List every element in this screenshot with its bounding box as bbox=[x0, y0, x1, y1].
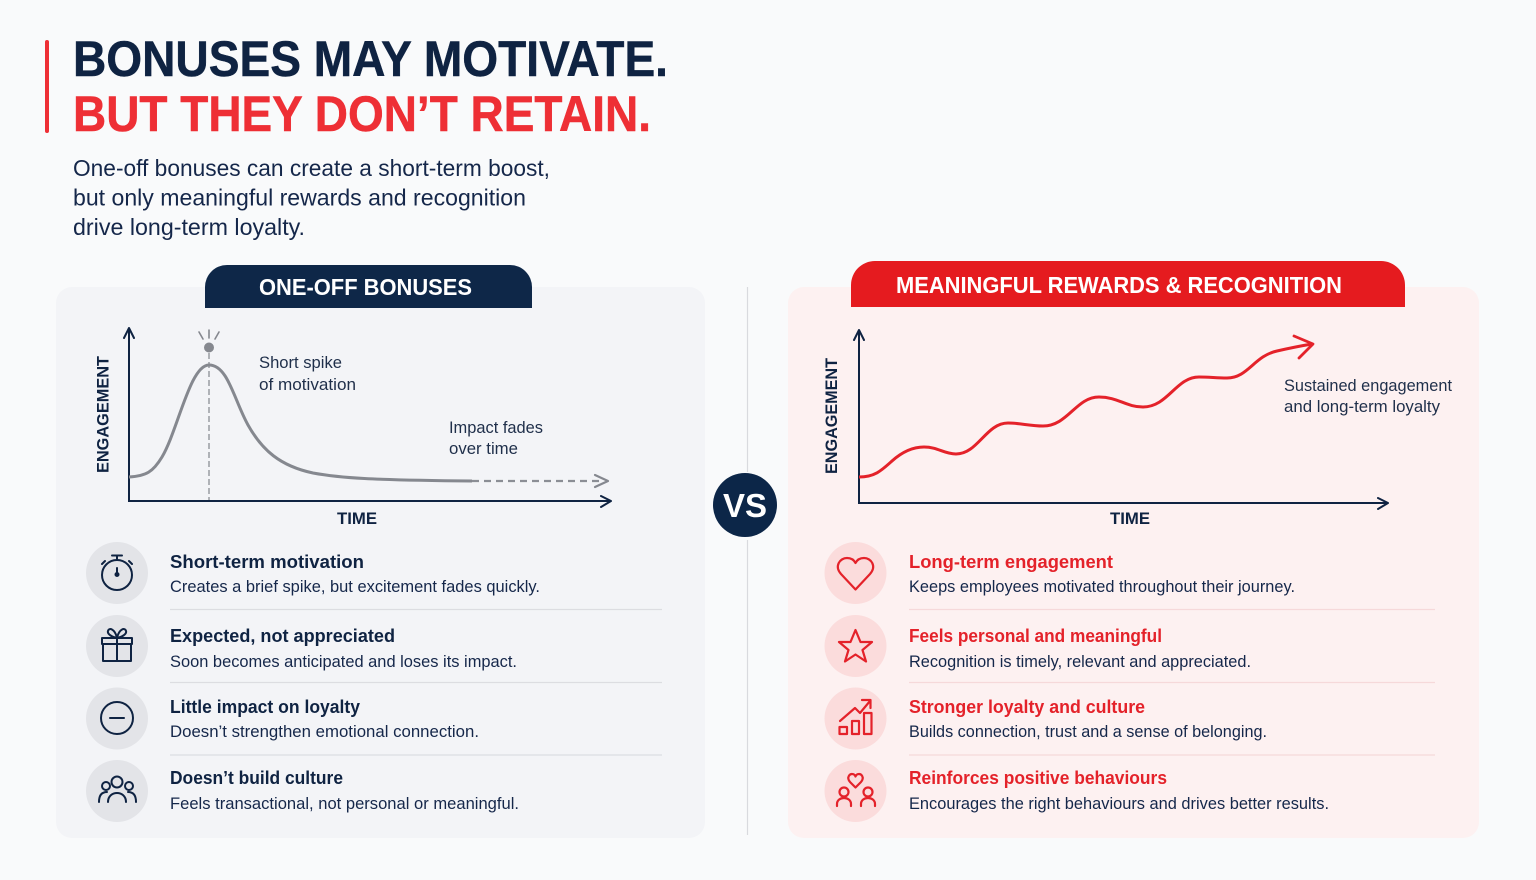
vs badge: VS bbox=[723, 487, 767, 524]
chart: sustained engagement: Sustained engagement bbox=[1284, 377, 1452, 395]
tab: one-off bonuses: ONE-OFF BONUSES bbox=[259, 274, 472, 300]
item: stronger loyalty and culture bbox=[824, 688, 1267, 750]
item: expected, not appreciated bbox=[86, 615, 517, 677]
title: BONUSES MAY MOTIVATE. bbox=[73, 31, 668, 87]
item: reinforces positive behaviours: Encourages the right behaviours and drives better results. bbox=[909, 795, 1329, 813]
item: long-term engagement: Keeps employees motivated throughout their journey. bbox=[909, 578, 1295, 596]
tab: meaningful rewards and recognition bbox=[851, 261, 1405, 307]
icon: growth chart bbox=[840, 700, 872, 734]
icon: star bbox=[839, 630, 872, 662]
chart: short spike of engagement: ENGAGEMENT bbox=[94, 356, 112, 473]
item: little impact on loyalty: Little impact on loyalty bbox=[170, 696, 361, 717]
chart: sustained engagement: ENGAGEMENT bbox=[823, 358, 841, 474]
item: stronger loyalty and culture: Stronger loyalty and culture bbox=[909, 696, 1145, 717]
icon: stopwatch bbox=[102, 556, 132, 590]
panel: meaningful rewards and recognition bbox=[788, 261, 1479, 838]
intro text: One-off bonuses can create a short-term boost, bbox=[73, 155, 550, 181]
title: BUT THEY DON’T RETAIN. bbox=[73, 86, 651, 142]
item: short-term motivation: Short-term motivation bbox=[170, 551, 364, 572]
item: reinforces positive behaviours: Reinforces positive behaviours bbox=[909, 767, 1167, 788]
intro text: drive long-term loyalty. bbox=[73, 214, 305, 240]
vs badge bbox=[713, 473, 777, 537]
header accent bar bbox=[45, 40, 49, 133]
chart: short spike of engagement: Impact fades bbox=[449, 419, 543, 437]
chart: short spike of engagement: Short spike bbox=[259, 354, 342, 372]
item: stronger loyalty and culture: Builds connection, trust and a sense of belonging. bbox=[909, 723, 1267, 741]
item: long-term engagement: Long-term engagement bbox=[909, 551, 1113, 572]
item: feels personal and meaningful: Recognition is timely, relevant and appreciated. bbox=[909, 653, 1251, 671]
title bbox=[73, 31, 668, 142]
chart: sustained engagement: TIME bbox=[1110, 510, 1150, 528]
item: reinforces positive behaviours bbox=[824, 760, 1329, 822]
chart: sustained engagement: and long-term loyalty bbox=[1284, 398, 1441, 416]
tab: one-off bonuses bbox=[205, 265, 532, 308]
tab: meaningful rewards and recognition: MEANINGFUL REWARDS & RECOGNITION bbox=[896, 272, 1342, 298]
chart: short spike of engagement: of motivation bbox=[259, 376, 356, 394]
icon: minus circle bbox=[101, 702, 133, 734]
icon: people bbox=[99, 776, 136, 802]
chart: sustained engagement bbox=[823, 330, 1452, 528]
item: expected, not appreciated: Expected, not appreciated bbox=[170, 625, 395, 646]
item: feels personal and meaningful bbox=[824, 615, 1251, 677]
item: little impact on loyalty bbox=[86, 688, 479, 750]
item: doesn't build culture: Feels transactional, not personal or meaningful. bbox=[170, 795, 519, 813]
chart: short spike of engagement bbox=[94, 328, 611, 528]
intro text bbox=[73, 155, 550, 240]
intro text: but only meaningful rewards and recognition bbox=[73, 184, 526, 210]
item: long-term engagement bbox=[824, 542, 1295, 604]
item: doesn't build culture: Doesn’t build culture bbox=[170, 767, 343, 788]
item: little impact on loyalty: Doesn’t strengthen emotional connection. bbox=[170, 723, 479, 741]
item: expected, not appreciated: Soon becomes anticipated and loses its impact. bbox=[170, 653, 517, 671]
item: feels personal and meaningful: Feels personal and meaningful bbox=[909, 625, 1162, 646]
icon: gift bbox=[102, 629, 132, 661]
icon: heart bbox=[838, 558, 873, 590]
icon: people with heart bbox=[837, 774, 875, 806]
item: short-term motivation bbox=[86, 542, 540, 604]
item: short-term motivation: Creates a brief spike, but excitement fades quickly. bbox=[170, 578, 540, 596]
panel: one-off bonuses bbox=[56, 265, 705, 838]
chart: short spike of engagement: over time bbox=[449, 440, 518, 458]
item: doesn't build culture bbox=[86, 760, 519, 822]
chart: short spike of engagement: TIME bbox=[337, 510, 377, 528]
